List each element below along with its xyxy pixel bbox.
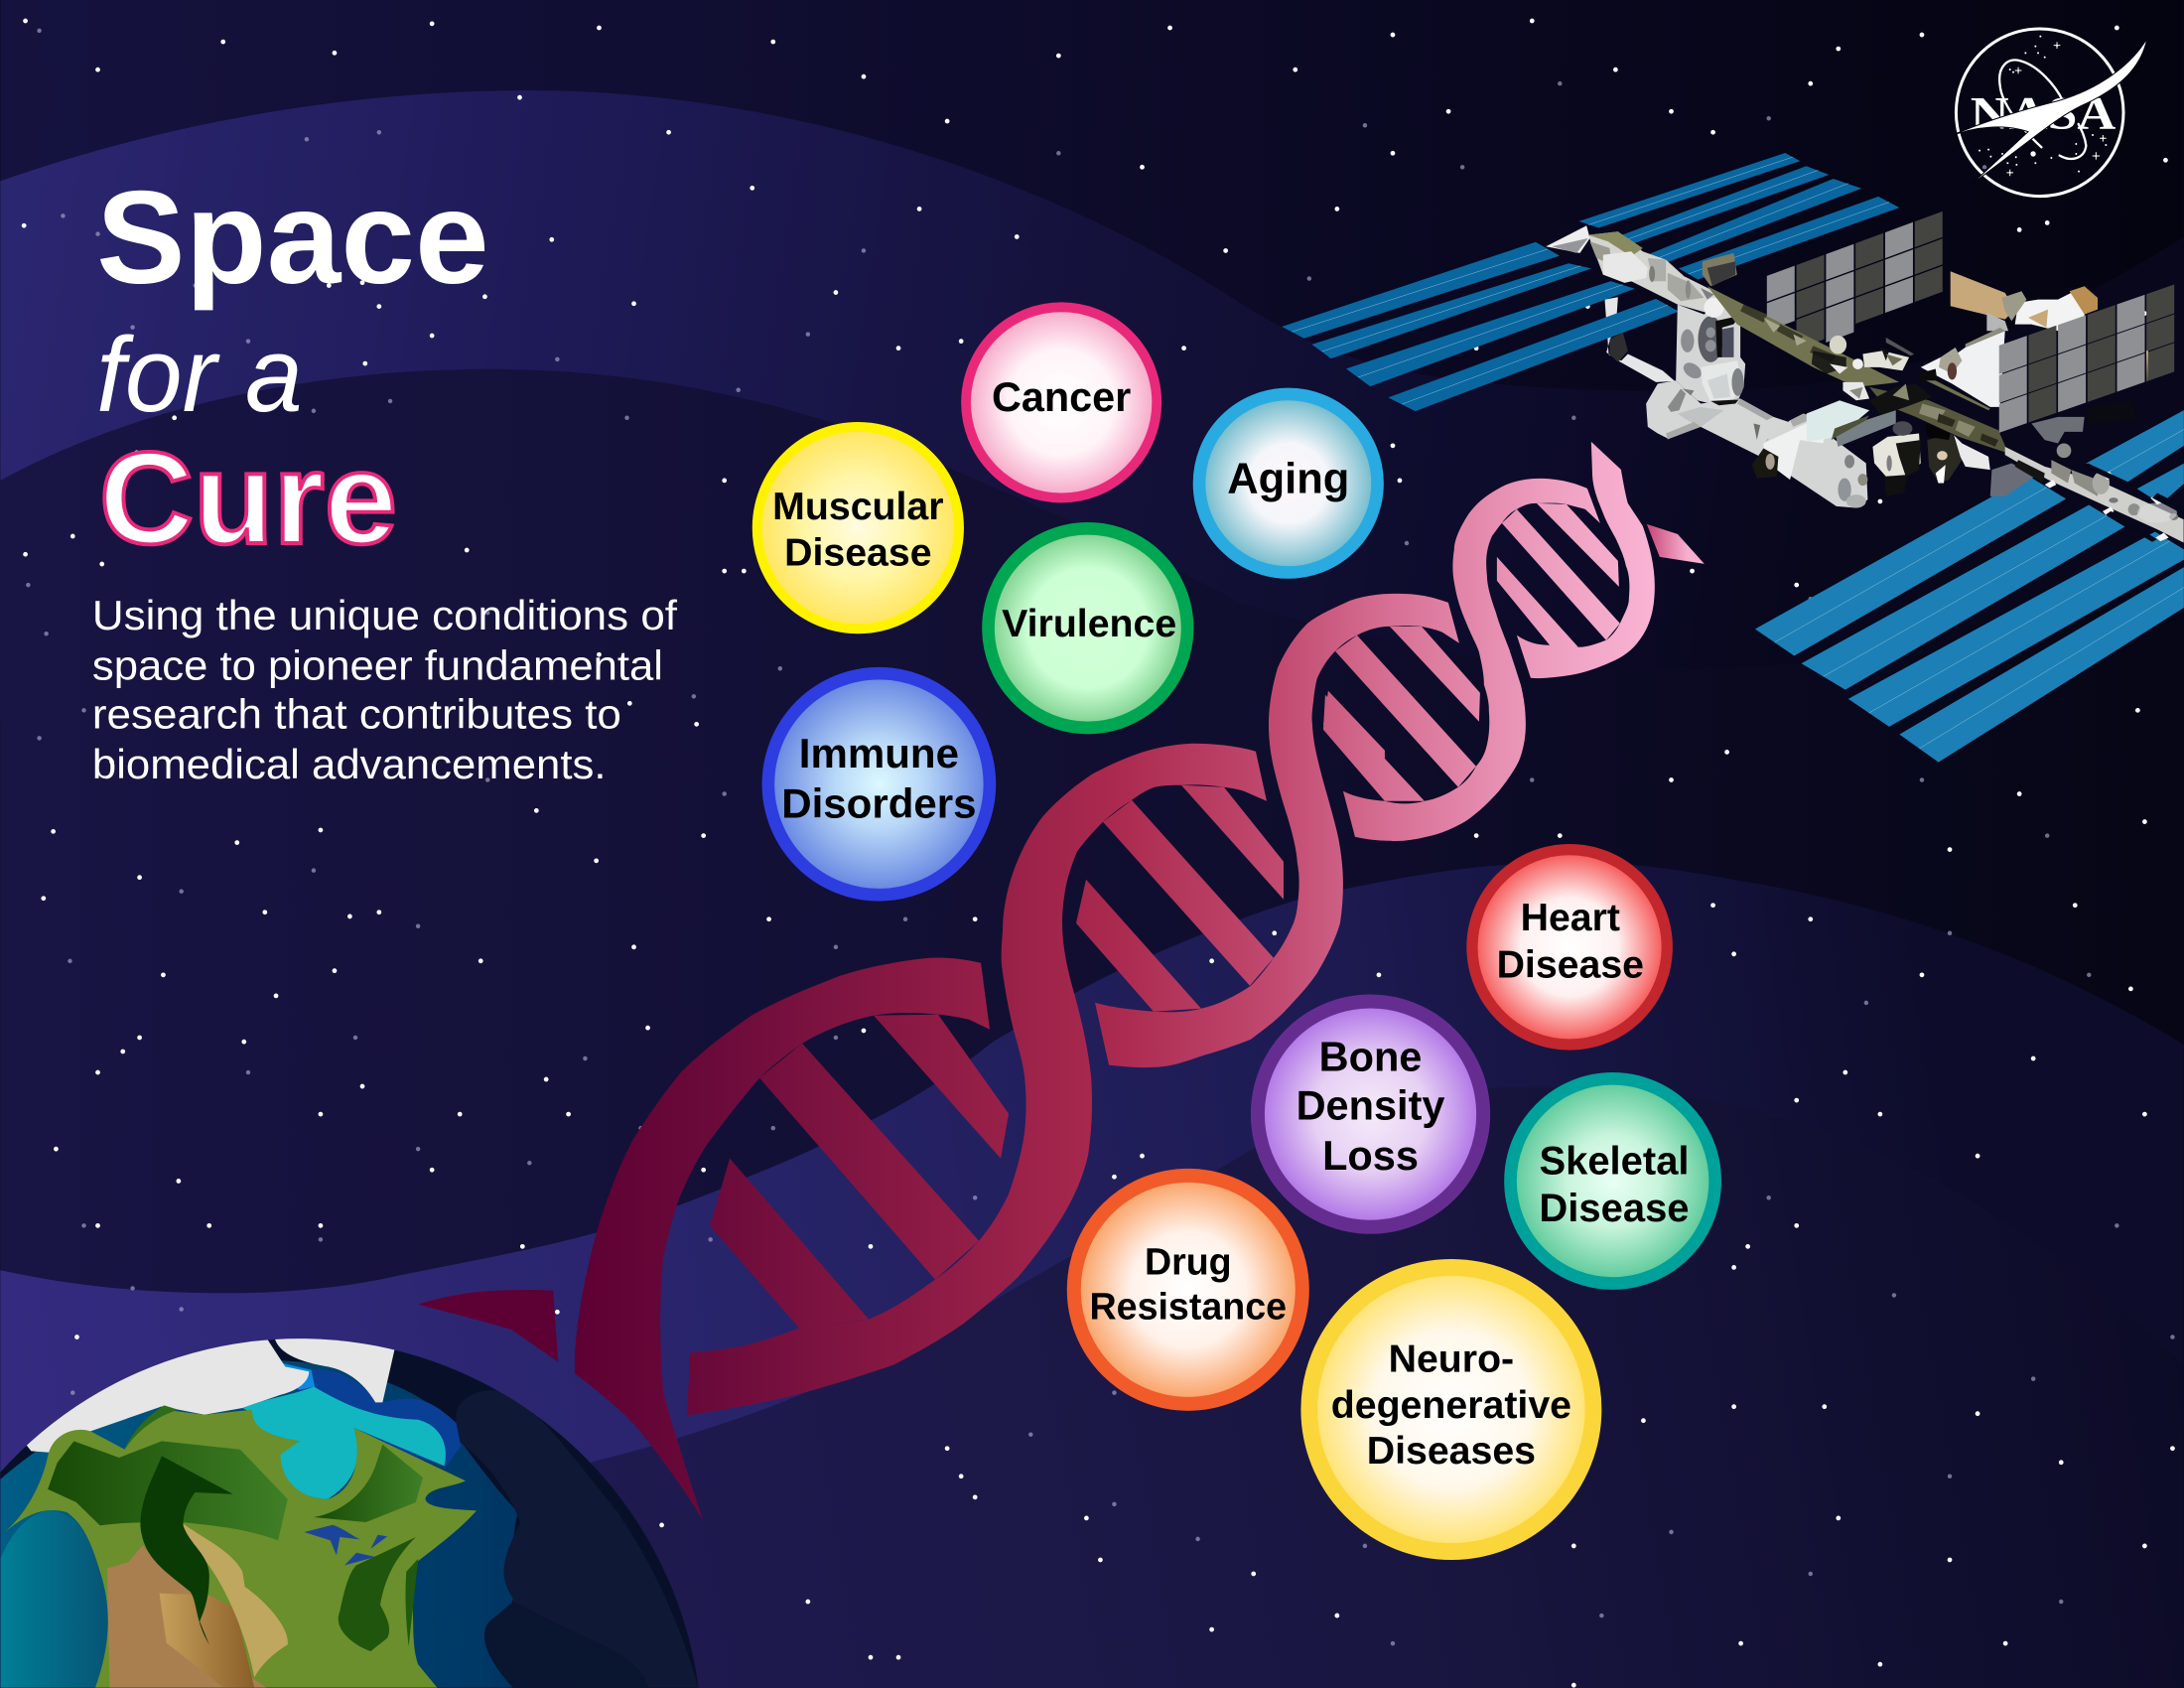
solar arrays blue xyxy=(1282,153,2184,763)
bubble: Immune Disorders: Disorders xyxy=(781,779,977,826)
starboard truss xyxy=(2005,447,2184,542)
bubble: Neurodegenerative Diseases: degenerative xyxy=(1331,1383,1571,1427)
lower legs xyxy=(1872,421,2035,496)
bubble: Virulence: Virulence xyxy=(1002,602,1176,645)
bubble: Drug Resistance: Resistance xyxy=(1090,1285,1287,1327)
dna strand top xyxy=(1517,442,1655,678)
central truss and legs xyxy=(1707,271,2184,542)
bubble: Heart Disease: Heart xyxy=(1521,896,1620,939)
tower xyxy=(1676,298,1745,404)
dna left tail xyxy=(418,1290,558,1362)
NASA chevron xyxy=(1947,38,2147,186)
bubble: Bone Density Loss: Bone xyxy=(1319,1034,1422,1080)
bubble: Skeletal Disease xyxy=(1510,1078,1715,1284)
dna strand second xyxy=(687,744,1267,1416)
bubble: Bone Density Loss: Loss xyxy=(1322,1132,1419,1179)
title: Cure: Cure xyxy=(99,425,397,571)
bubble: Neurodegenerative Diseases: Diseases xyxy=(1367,1429,1536,1473)
bubble: Neurodegenerative Diseases xyxy=(1309,1267,1593,1552)
bubble: Heart Disease: Disease xyxy=(1497,943,1644,987)
NASA wordmark: NASA xyxy=(1971,87,2116,139)
solar array grey far xyxy=(1767,211,1943,364)
bubble: Muscular Disease xyxy=(757,427,959,629)
port truss xyxy=(1546,225,1737,318)
bubble: Virulence xyxy=(989,528,1187,728)
bubble: Heart Disease xyxy=(1472,850,1667,1045)
NASA logo xyxy=(1947,29,2147,197)
upper small modules xyxy=(1812,336,1914,374)
description text: biomedical advancements. xyxy=(92,741,606,787)
tubes xyxy=(1807,400,1896,447)
bubble: Cancer xyxy=(966,307,1157,497)
dna rungs xyxy=(710,503,1620,1329)
solar array grey right xyxy=(1999,284,2174,433)
earth xyxy=(0,1327,699,1688)
dna strand third xyxy=(1095,594,1459,1067)
description text: research that contributes to xyxy=(92,691,621,738)
small robotic arm xyxy=(1605,297,1675,382)
lower block xyxy=(1646,380,1793,457)
bubble: Bone Density Loss xyxy=(1258,1001,1483,1227)
main module xyxy=(1752,414,1867,507)
description text xyxy=(92,592,677,787)
bubble: Skeletal Disease: Disease xyxy=(1539,1187,1690,1230)
description text: space to pioneer fundamental xyxy=(92,641,663,688)
dna double helix xyxy=(418,442,1705,1521)
olive truss sections xyxy=(1707,286,2008,454)
truss, tower and main modules xyxy=(1546,225,1867,507)
bubble: Aging xyxy=(1199,394,1378,572)
bubble: Bone Density Loss: Density xyxy=(1297,1082,1444,1129)
dna right tail xyxy=(1647,524,1705,564)
bubble: Drug Resistance: Drug xyxy=(1145,1240,1232,1282)
node module and radiator xyxy=(1917,271,2098,410)
bubble: Immune Disorders xyxy=(768,673,990,895)
bubble: Cancer: Cancer xyxy=(992,374,1131,420)
bubble: Immune Disorders: Immune xyxy=(799,730,959,776)
bubble: Drug Resistance xyxy=(1074,1176,1302,1404)
bubble: Skeletal Disease: Skeletal xyxy=(1539,1139,1690,1183)
dna strand fourth xyxy=(1343,479,1600,841)
bubble: Aging: Aging xyxy=(1227,456,1349,503)
bubble: Neurodegenerative Diseases: Neuro- xyxy=(1389,1337,1514,1381)
description text: Using the unique conditions of xyxy=(92,592,677,638)
bubble: Muscular Disease: Muscular xyxy=(772,485,944,528)
title: Space: Space xyxy=(96,164,489,312)
space station xyxy=(1282,153,2184,763)
bubble: Muscular Disease: Disease xyxy=(784,530,932,574)
title: for a: for a xyxy=(96,315,303,434)
station underside equipment xyxy=(2031,351,2148,458)
dna strand lower left xyxy=(575,957,990,1521)
